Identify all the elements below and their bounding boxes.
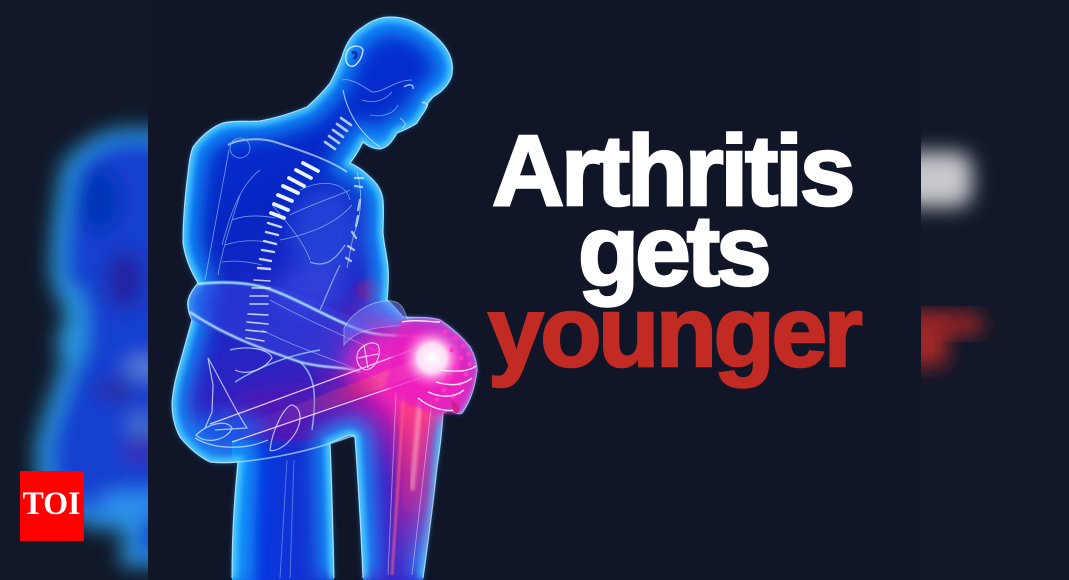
femur bone	[210, 350, 426, 442]
tibia bones	[280, 392, 432, 578]
blurred backdrop: figure	[20, 112, 148, 580]
knee pain glow	[347, 328, 476, 575]
central panel	[148, 0, 921, 580]
blurred backdrop: title echo	[900, 152, 982, 366]
TOI logo	[20, 471, 84, 541]
rib cage and shoulder lines	[205, 138, 352, 280]
raised knee cap	[344, 301, 410, 345]
wrist bones	[357, 343, 379, 370]
figure: man holding knee	[168, 13, 480, 580]
face and skull lines	[342, 46, 427, 147]
thigh edges	[235, 350, 355, 462]
title	[488, 115, 862, 388]
sternum and chest vertebrae	[320, 172, 363, 310]
title line: gets: gets	[578, 195, 768, 307]
title line: younger: younger	[488, 276, 862, 388]
TOI logo: TOI	[22, 486, 80, 522]
pelvis and hip bones	[195, 348, 300, 451]
forearm	[189, 282, 430, 382]
spine	[246, 118, 351, 341]
hand with glowing joints	[385, 318, 476, 414]
title line: Arthritis: Arthritis	[492, 115, 852, 227]
body silhouette	[168, 13, 480, 580]
